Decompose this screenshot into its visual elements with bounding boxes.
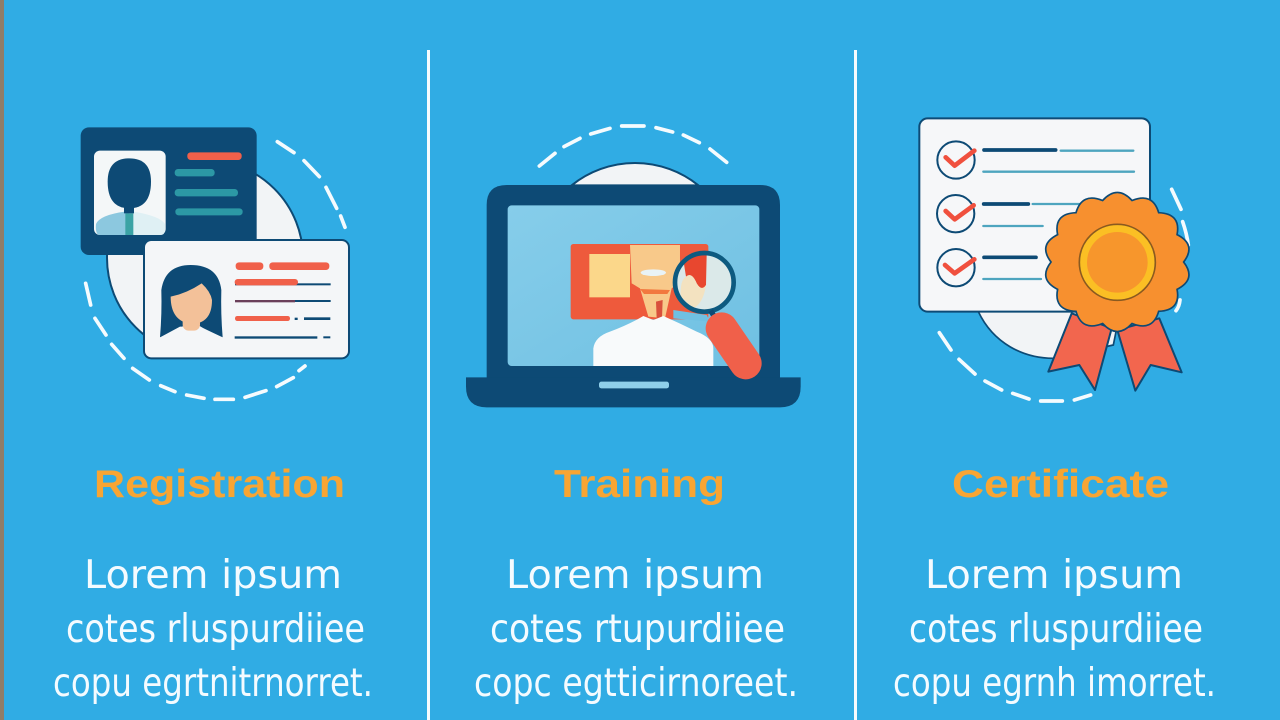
text block: registration: Lorem ipsum bbox=[84, 553, 342, 598]
icon: laptop with magnifier bbox=[466, 126, 801, 407]
text block: training: Lorem ipsum bbox=[506, 553, 764, 598]
icon: ID cards bbox=[81, 127, 349, 399]
text block: certificate: cotes rluspurdiiee bbox=[909, 607, 1203, 652]
icon: checklist with award rosette bbox=[919, 118, 1189, 401]
text block: training: cotes rtupurdiiee bbox=[490, 607, 785, 652]
text block: registration: copu egrtnitrnorret. bbox=[53, 661, 373, 706]
text block: registration bbox=[53, 553, 373, 706]
text block: certificate bbox=[893, 553, 1216, 706]
heading: registration: Registration bbox=[94, 463, 345, 506]
heading: training: Training bbox=[554, 463, 725, 506]
text block: training: copc egtticirnoreet. bbox=[474, 661, 798, 706]
panel: certificate bbox=[893, 118, 1216, 706]
text block: certificate: Lorem ipsum bbox=[925, 553, 1183, 598]
panel: registration bbox=[53, 127, 373, 706]
panel: training bbox=[466, 126, 801, 706]
text block: certificate: copu egrnh imorret. bbox=[893, 661, 1216, 706]
text block: training bbox=[474, 553, 798, 706]
text block: registration: cotes rluspurdiiee bbox=[66, 607, 365, 652]
heading: certificate: Certificate bbox=[952, 463, 1169, 506]
